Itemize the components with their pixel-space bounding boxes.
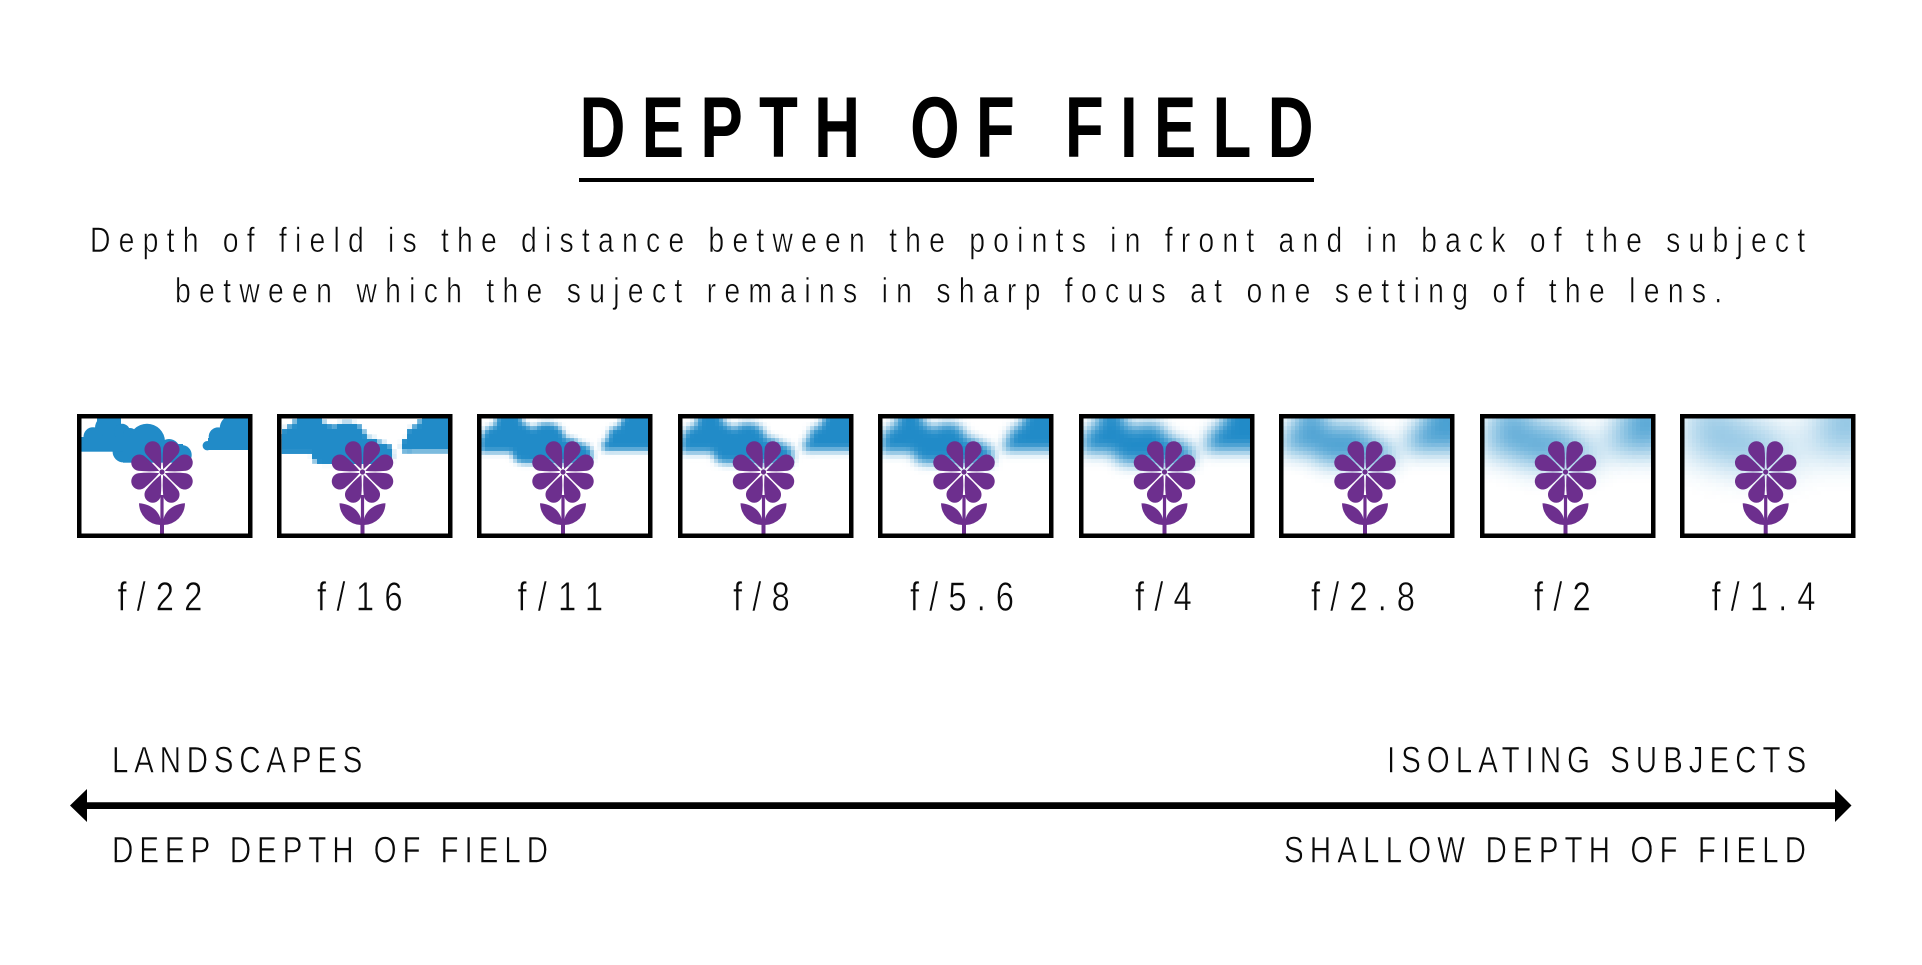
clouds blurred — [882, 418, 1049, 473]
clouds blurred — [1484, 418, 1651, 487]
label f/22: f/22 — [118, 573, 202, 619]
panel: f/8 — [678, 414, 854, 538]
label f/4: f/4 — [1135, 573, 1192, 619]
frame — [680, 416, 851, 536]
description line 2: between which the suject remains in sharp focus at one setting of the lens. — [175, 270, 1722, 310]
clouds slightly blurred — [282, 418, 448, 468]
label: shallow depth of field: SHALLOW DEPTH OF FIELD — [1284, 830, 1806, 871]
f-stop labels — [118, 573, 1816, 619]
frame — [1081, 416, 1252, 536]
icon: flower — [1528, 434, 1603, 535]
frame — [1281, 416, 1452, 536]
description line 1: Depth of field is the distance between the points in front and in back of the subject — [90, 220, 1805, 260]
icon: flower — [1127, 434, 1202, 535]
frame — [880, 416, 1051, 536]
frame — [279, 416, 450, 536]
frame — [479, 416, 650, 536]
icon: flower — [726, 434, 801, 535]
label: landscapes: LANDSCAPES — [112, 740, 362, 781]
frame — [79, 416, 250, 536]
clouds blurred — [1284, 418, 1450, 479]
panel: f/1.4 — [1680, 414, 1856, 538]
label f/16: f/16 — [317, 573, 403, 619]
label f/2: f/2 — [1534, 573, 1591, 619]
title underline — [579, 178, 1314, 182]
icon: flower — [124, 434, 200, 535]
clouds blurred — [1684, 394, 1871, 465]
panel: f/11 — [477, 414, 652, 538]
panel: f/4 — [1079, 414, 1254, 538]
icon: flower — [926, 434, 1002, 535]
label f/8: f/8 — [733, 573, 790, 619]
label: deep depth of field: DEEP DEPTH OF FIELD — [112, 830, 548, 871]
clouds blurred — [682, 418, 849, 471]
icon: flower — [525, 434, 601, 535]
clouds blurred — [1084, 418, 1250, 475]
arrow: double-headed scale — [70, 789, 1852, 822]
icon: flower — [1327, 434, 1403, 535]
icon: flower — [325, 434, 400, 535]
panel: f/2 — [1480, 414, 1656, 538]
panel: f/22 — [77, 414, 252, 538]
panel: f/5.6 — [878, 414, 1054, 538]
icon: flower — [1728, 434, 1803, 535]
panel: f/2.8 — [1279, 414, 1454, 538]
label f/2.8: f/2.8 — [1311, 573, 1415, 619]
label f/1.4: f/1.4 — [1712, 573, 1816, 619]
label f/11: f/11 — [518, 573, 603, 619]
label: isolating subjects: ISOLATING SUBJECTS — [1387, 740, 1806, 781]
scale labels — [112, 740, 1806, 871]
label f/5.6: f/5.6 — [910, 573, 1014, 619]
description text — [90, 220, 1805, 310]
title: DEPTH OF FIELD — [580, 81, 1314, 176]
clouds blurred — [482, 418, 648, 470]
frame — [1482, 416, 1653, 536]
panel: f/16 — [277, 414, 452, 538]
frame — [1682, 416, 1853, 536]
clouds sharp — [82, 418, 248, 463]
